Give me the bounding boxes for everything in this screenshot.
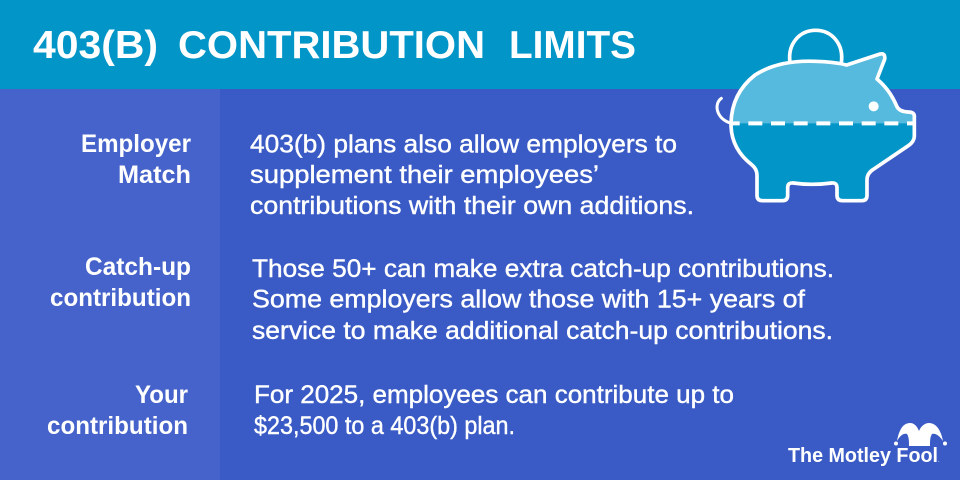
text: Your contribution description [254,381,734,440]
text: Your contribution description: $23,500 to a 403(b) plan. [254,412,515,440]
text: Catch-up description: service to make additional catch-up contributions. [252,317,833,345]
dashed fill line [731,117,913,129]
logo: The Motley Fool [788,423,947,467]
title: LIMITS [509,24,636,67]
label: Your contribution [47,381,188,440]
label: Employer Match: Match [118,161,191,189]
label: Employer Match [81,130,191,189]
pig body lower fill [731,54,914,201]
label: Your contribution: contribution [47,412,188,440]
icon: jester hat [897,423,943,446]
text: Employer Match description: contributions with their own additions. [250,192,694,220]
text: Catch-up description [252,255,834,345]
text: Catch-up description: Some employers allow those with 15+ years of [252,286,805,314]
icon: piggy bank with coin [717,30,914,201]
title: 403(B) [33,24,158,67]
pig eye [869,101,879,111]
label: Your contribution: Your [135,381,188,409]
text: Employer Match description: 403(b) plans also allow employers to [250,130,677,158]
text: Catch-up description: Those 50+ can make extra catch-up contributions. [252,255,834,283]
label: Employer Match: Employer [81,130,191,158]
panel: left label column [0,89,220,480]
pig tail [717,98,731,123]
logo: The Motley Fool: The Motley Fool [788,445,938,467]
text: Employer Match description [250,130,694,220]
pig upper light fill [731,54,914,123]
icon: coin [790,30,842,63]
title: CONTRIBUTION [178,24,485,67]
header band [0,0,960,89]
text: Your contribution description: For 2025, employees can contribute up to [254,381,734,409]
label: Catch-up contribution: Catch-up [85,253,191,281]
logo: The Motley Fool: . [938,458,940,464]
label: Catch-up contribution: contribution [50,284,191,312]
title [33,24,636,67]
pig outline [731,54,914,201]
text: Employer Match description: supplement their employees’ [250,161,599,189]
label: Catch-up contribution [50,253,191,312]
